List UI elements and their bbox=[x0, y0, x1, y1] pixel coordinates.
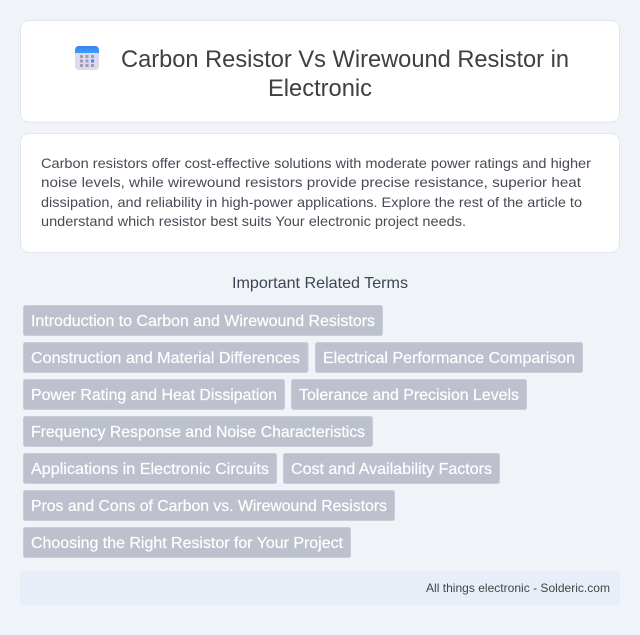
tag: Choosing the Right Resistor for Your Project bbox=[31, 535, 344, 552]
tag: Construction and Material Differences bbox=[31, 350, 300, 367]
tag: Tolerance and Precision Levels bbox=[299, 387, 519, 404]
text block: summary paragraph: understand which resistor best suits Your electronic project needs. bbox=[41, 213, 466, 229]
tag bbox=[24, 306, 382, 336]
text block: summary paragraph bbox=[41, 155, 591, 229]
tag bbox=[24, 490, 394, 520]
text block: summary paragraph: dissipation, and reliability in high-power applications. Explore the rest of the article to bbox=[41, 194, 582, 210]
tag bbox=[284, 454, 500, 484]
tag: Applications in Electronic Circuits bbox=[31, 461, 269, 478]
tag bbox=[292, 380, 526, 410]
title bbox=[121, 46, 569, 102]
tag bbox=[24, 454, 276, 484]
footer bbox=[20, 571, 620, 605]
panel: title card bbox=[20, 20, 620, 122]
tag bbox=[24, 380, 284, 410]
tag: Frequency Response and Noise Characteristics bbox=[31, 424, 365, 441]
title: Electronic bbox=[268, 75, 372, 102]
tag bbox=[24, 528, 350, 558]
tag list bbox=[24, 306, 582, 558]
heading: important related terms: Important Related Terms bbox=[232, 275, 408, 292]
icon: calendar grid bbox=[75, 46, 99, 70]
text block: summary paragraph: Carbon resistors offer cost-effective solutions with moderate power ratings and higher bbox=[41, 155, 591, 171]
text block: summary paragraph: noise levels, while wirewound resistors provide precise resistance, superior heat bbox=[41, 174, 581, 190]
tag: Pros and Cons of Carbon vs. Wirewound Resistors bbox=[31, 498, 387, 515]
panel: summary bbox=[20, 134, 620, 252]
tag: Electrical Performance Comparison bbox=[323, 350, 575, 367]
title: Carbon Resistor Vs Wirewound Resistor in bbox=[121, 46, 569, 73]
tag: Cost and Availability Factors bbox=[291, 461, 492, 478]
tag: Power Rating and Heat Dissipation bbox=[31, 387, 277, 404]
tag bbox=[316, 342, 582, 372]
footer: All things electronic - Solderic.com bbox=[426, 581, 610, 595]
tag bbox=[24, 342, 308, 372]
tag: Introduction to Carbon and Wirewound Resistors bbox=[31, 313, 375, 330]
tag bbox=[24, 416, 372, 446]
